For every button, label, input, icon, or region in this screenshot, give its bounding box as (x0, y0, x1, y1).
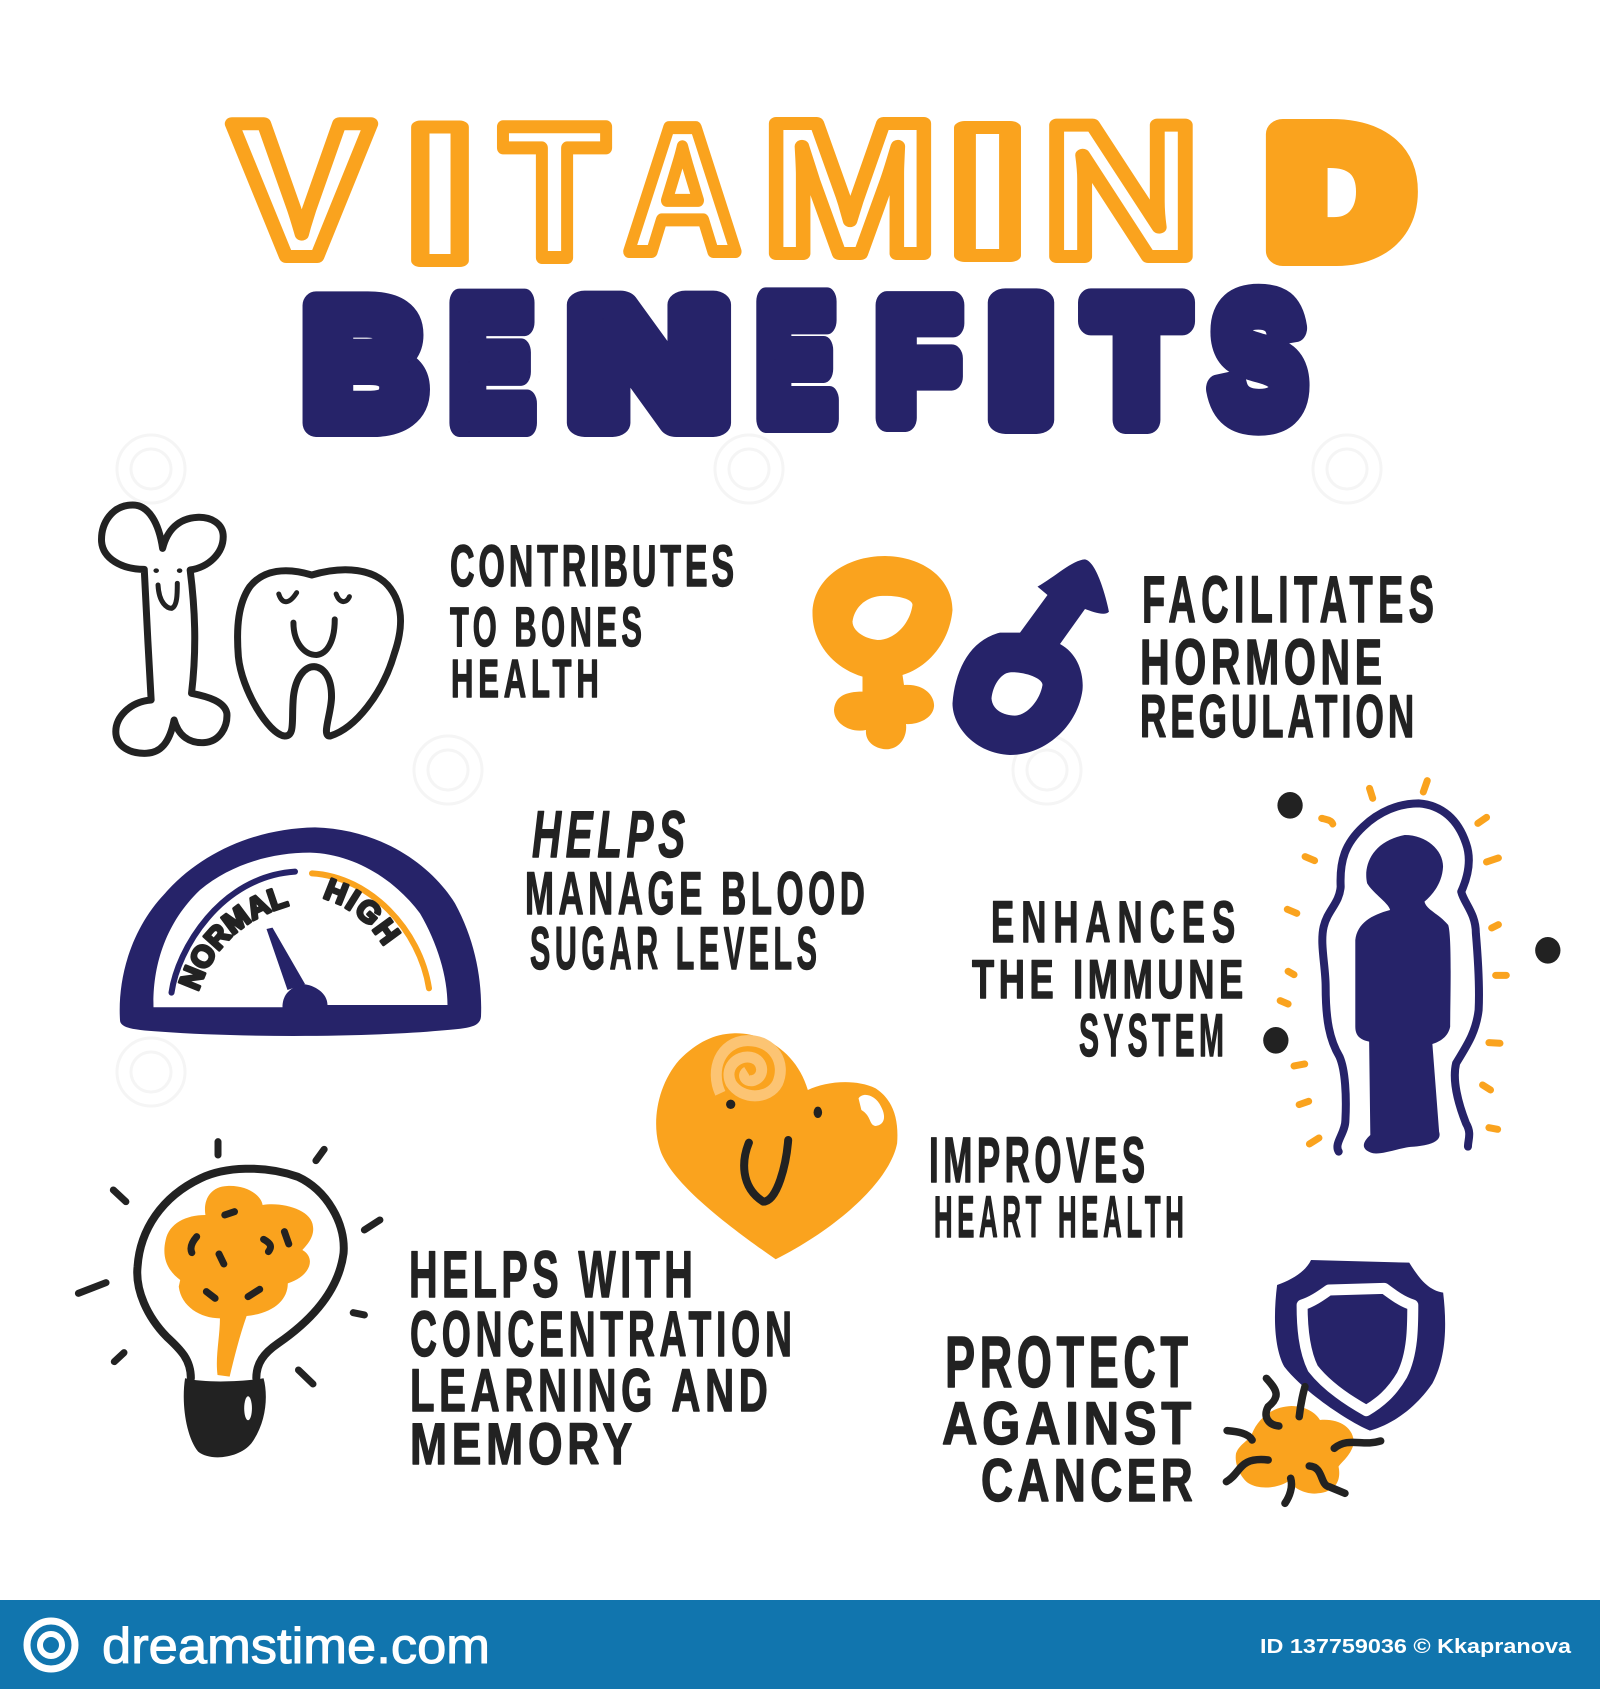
text: helps with concentration learning and memory: MEMORY (410, 1411, 632, 1476)
title: Vitamin D: A (625, 90, 740, 290)
title: Vitamin D: I (944, 88, 1031, 296)
text: helps manage blood sugar levels (525, 798, 865, 983)
text: contributes to bones health: CONTRIBUTES (450, 535, 734, 599)
text: helps manage blood sugar levels: MANAGE BLOOD (525, 861, 865, 927)
footer bar (0, 1600, 1600, 1689)
text: contributes to bones health (450, 535, 734, 709)
icon: blood sugar gauge: NORMAL (178, 888, 290, 992)
title: Benefits: B (305, 269, 424, 460)
text: facilitates hormone regulation: HORMONE (1140, 627, 1382, 698)
icon: dreamstime spiral logo (27, 1621, 75, 1669)
text: helps manage blood sugar levels: SUGAR LEVELS (530, 916, 817, 983)
icon: blood sugar gauge: HIGH (322, 877, 402, 946)
text: improves heart health (929, 1124, 1184, 1250)
icon: bone and tooth (102, 505, 401, 753)
text: enhances the immune system: SYSTEM (1079, 1003, 1224, 1070)
text: enhances the immune system (972, 891, 1243, 1070)
text: protect against cancer (942, 1322, 1193, 1515)
title: Vitamin D: T (501, 86, 608, 298)
text: helps with concentration learning and memory: LEARNING AND (410, 1357, 768, 1424)
title: Benefits: I (991, 266, 1051, 457)
text: contributes to bones health: HEALTH (451, 649, 599, 709)
text: improves heart health: IMPROVES (929, 1124, 1145, 1196)
footer bar: dreamstime.com (102, 1618, 490, 1674)
title: Vitamin D: M (762, 84, 938, 294)
title: Benefits: E (451, 266, 532, 461)
text: protect against cancer: CANCER (981, 1448, 1193, 1515)
title: Vitamin D: D (1270, 98, 1409, 288)
text: helps with concentration learning and memory (409, 1238, 792, 1476)
text: helps with concentration learning and memory: HELPS WITH (409, 1238, 693, 1312)
title: Benefits: S (1213, 263, 1304, 458)
icon: smiling heart (656, 1033, 897, 1259)
text: facilitates hormone regulation: REGULATION (1140, 683, 1414, 750)
text: facilitates hormone regulation: FACILITATES (1142, 563, 1434, 637)
text: contributes to bones health: TO BONES (450, 595, 642, 658)
title: Benefits: T (1089, 266, 1184, 457)
footer bar: ID 137759036 © Kkapranova (1260, 1636, 1572, 1658)
title: Benefits: E (758, 265, 834, 456)
icon: blood sugar gauge (120, 827, 482, 1036)
icon: light bulb with brain (78, 1142, 380, 1457)
text: helps with concentration learning and memory: CONCENTRATION (410, 1300, 792, 1371)
text: facilitates hormone regulation (1140, 563, 1434, 750)
title: Vitamin D: V (230, 82, 372, 298)
title: Benefits: F (878, 270, 958, 453)
text: helps manage blood sugar levels: HELPS (532, 798, 685, 871)
text: improves heart health: HEART HEALTH (934, 1184, 1184, 1250)
title: Benefits: N (570, 268, 728, 460)
icon: protected human figure (1263, 781, 1560, 1154)
title: Vitamin D: I (402, 86, 478, 302)
text: enhances the immune system: ENHANCES (991, 891, 1235, 955)
title: Vitamin D: N (1042, 84, 1200, 298)
text: enhances the immune system: THE IMMUNE (972, 948, 1243, 1010)
text: protect against cancer: PROTECT (945, 1322, 1188, 1403)
title: Benefits (305, 263, 1304, 461)
title: Vitamin D (230, 82, 1409, 302)
icon: shield and cancer cell (1226, 1260, 1445, 1503)
icon: female and male symbols (812, 556, 1109, 755)
text: protect against cancer: AGAINST (942, 1389, 1191, 1457)
